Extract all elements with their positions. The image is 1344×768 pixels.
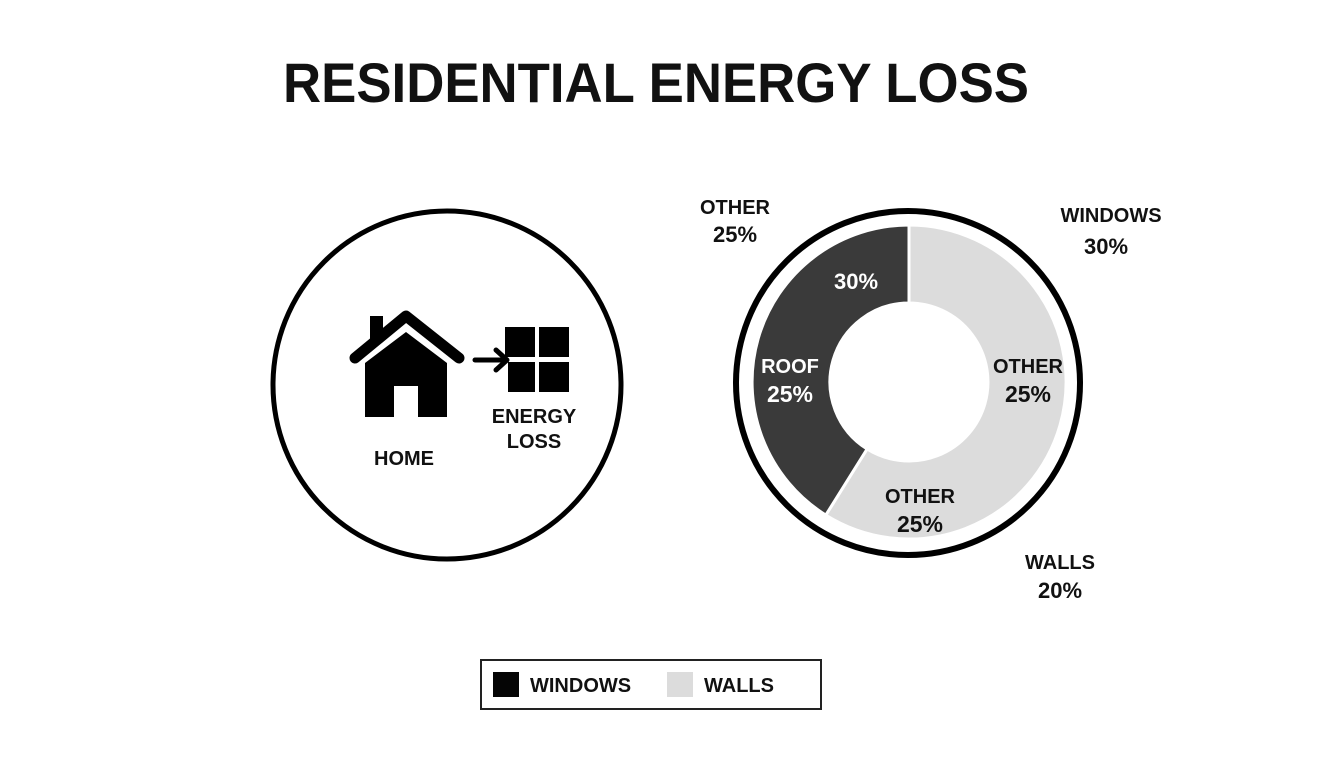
segment label: other bottom: OTHER — [885, 486, 955, 508]
title: RESIDENTIAL ENERGY LOSS — [283, 51, 1029, 114]
label: energy loss: ENERGY — [492, 406, 576, 428]
label: home: HOME — [374, 448, 434, 470]
segment label: other right: OTHER — [993, 356, 1063, 378]
label: energy loss: LOSS — [507, 431, 561, 453]
legend: WINDOWS — [530, 675, 631, 697]
icon: window grid — [505, 327, 569, 392]
segment label: roof: 25% — [767, 381, 813, 407]
segment label: roof: ROOF — [761, 356, 819, 378]
callout: other 25%: 25% — [713, 222, 757, 247]
chart: donut — [736, 211, 1080, 555]
panel: home energy loss circle — [273, 211, 621, 559]
callout: walls 20%: 20% — [1038, 578, 1082, 603]
legend — [481, 660, 821, 709]
legend: WALLS — [704, 675, 774, 697]
callout: walls 20%: WALLS — [1025, 552, 1095, 574]
callout: other 25%: OTHER — [700, 197, 770, 219]
segment label: other right: 25% — [1005, 381, 1051, 407]
icon: house — [355, 316, 459, 417]
callout: windows 30%: WINDOWS — [1060, 205, 1162, 227]
segment label: other bottom: 25% — [897, 511, 943, 537]
icon: arrow — [475, 350, 507, 370]
segment label: 30%: 30% — [834, 269, 878, 294]
callout: windows 30%: 30% — [1084, 234, 1128, 259]
